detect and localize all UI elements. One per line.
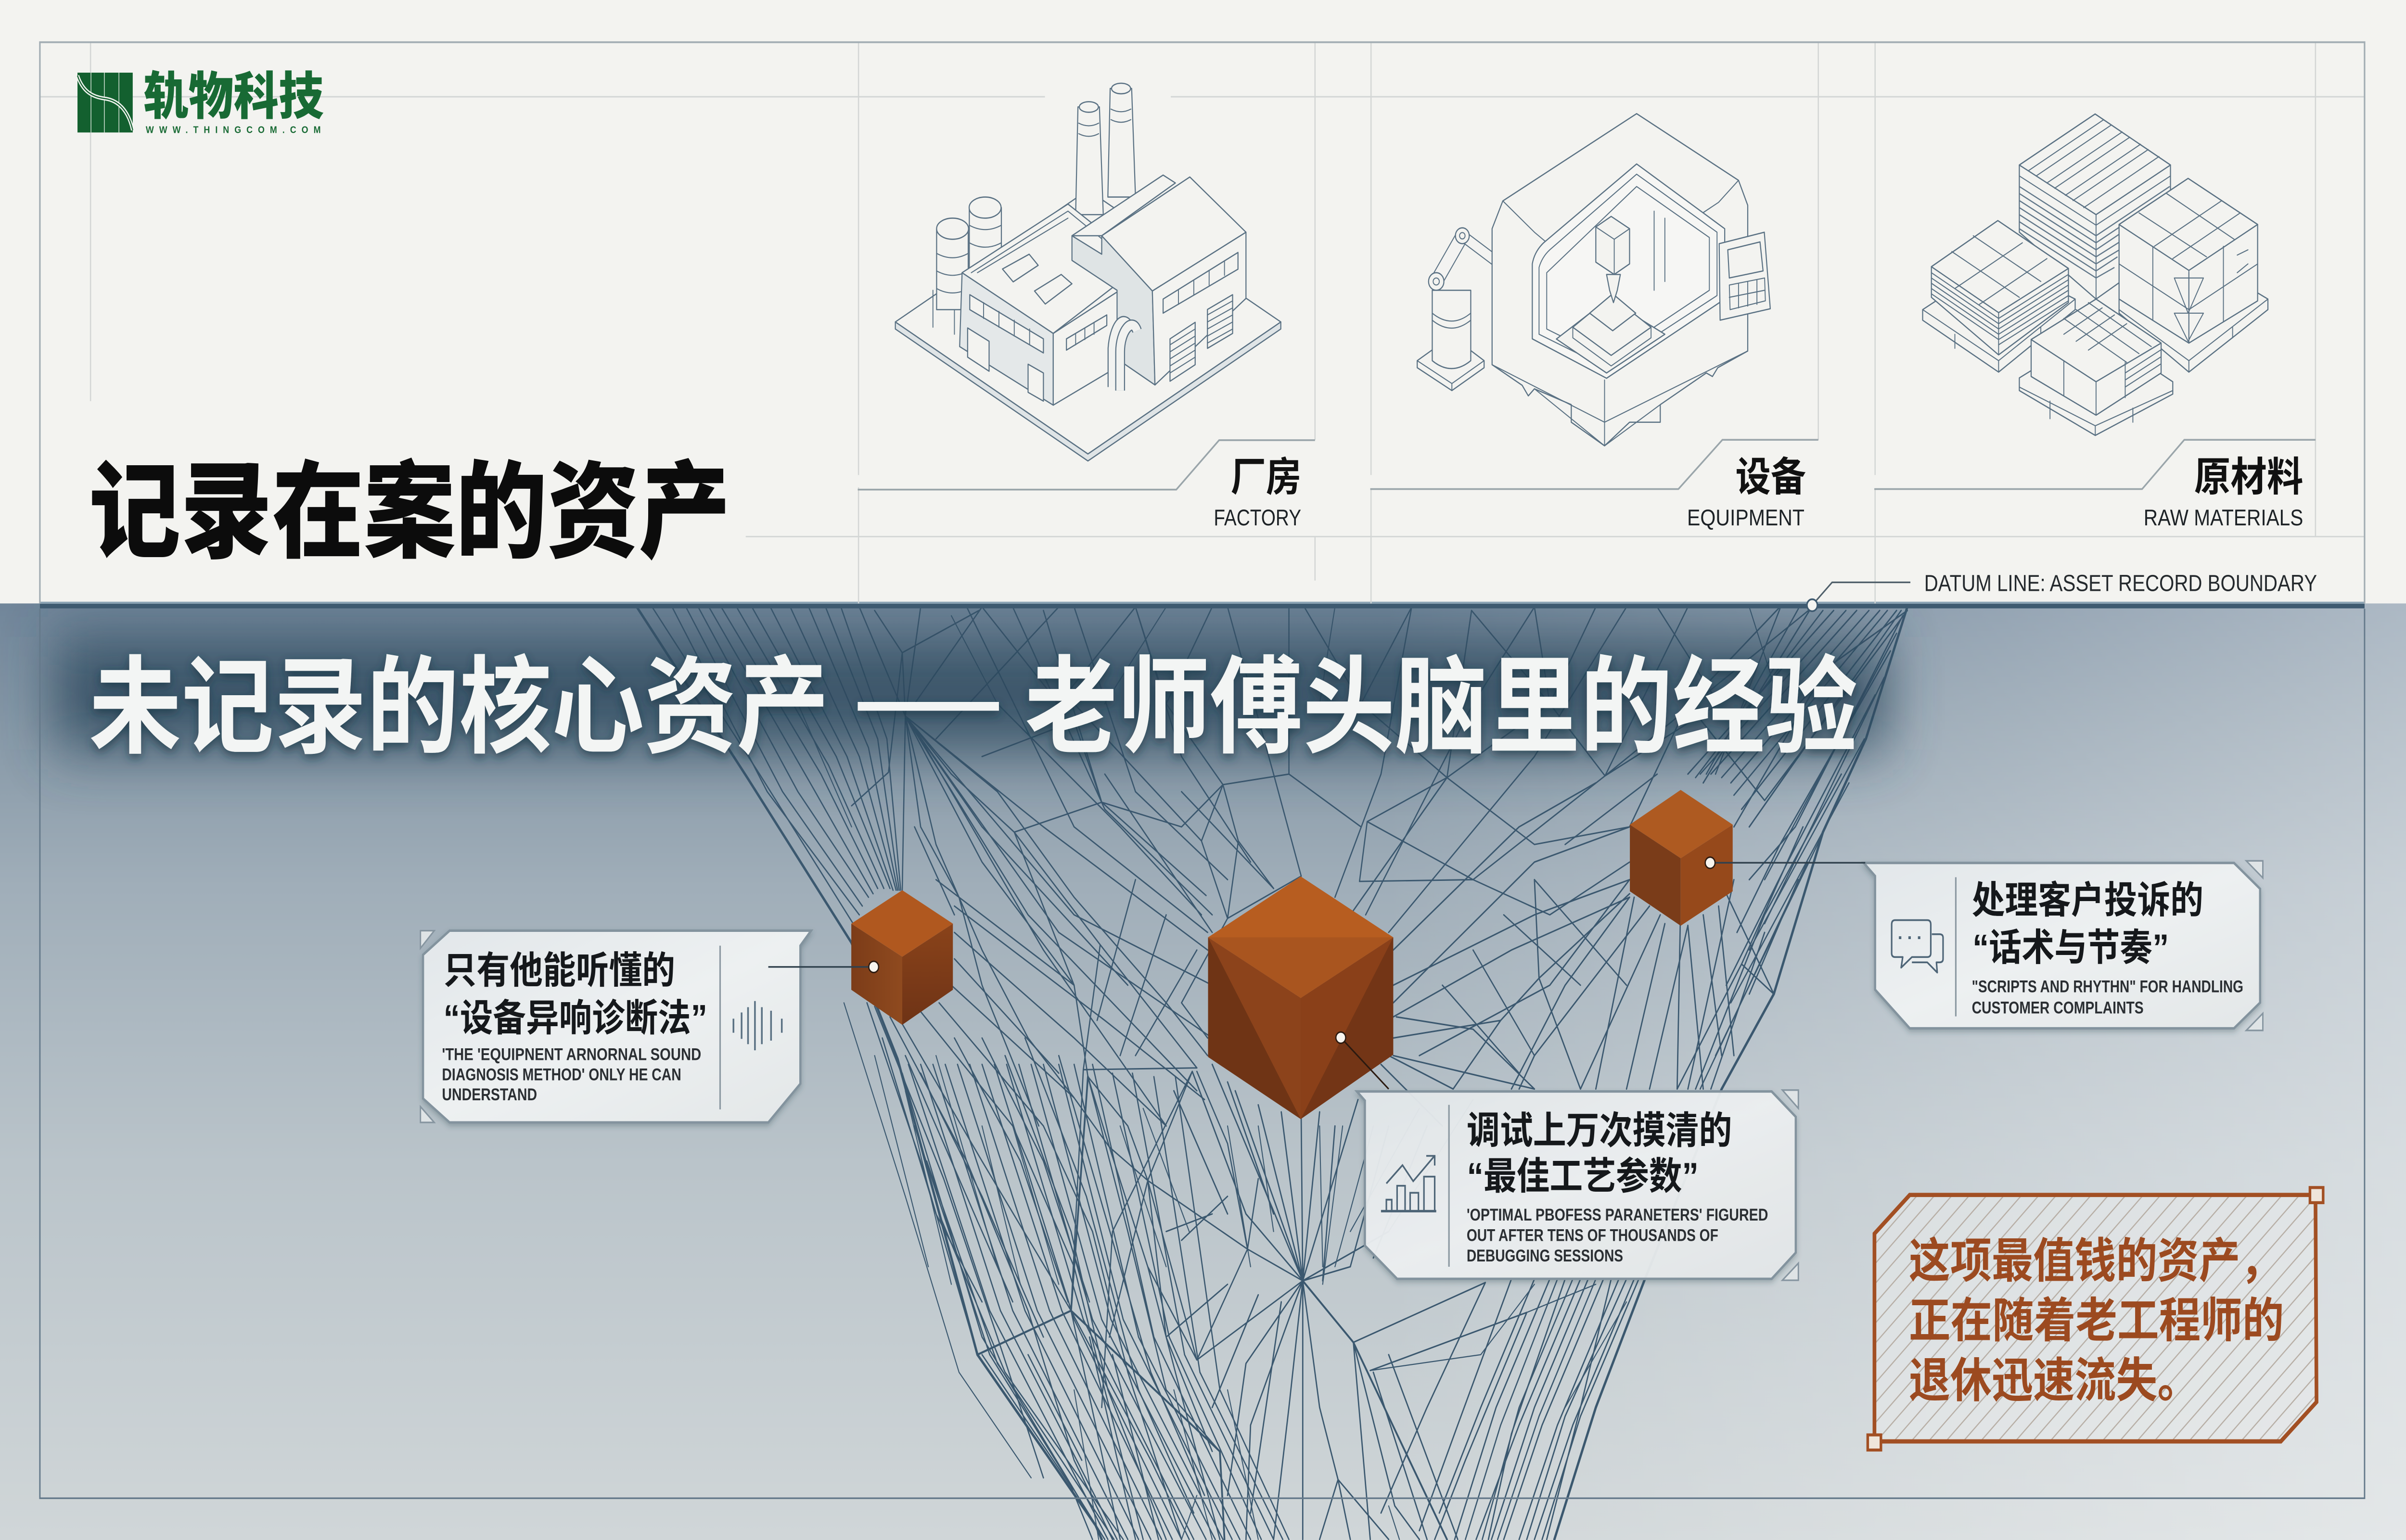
english description: DEBUGGING SESSIONS [1467, 1246, 1623, 1265]
label text: FACTORY: FACTORY [1214, 505, 1301, 531]
heading: recorded assets: 记录在案的资产 [89, 427, 730, 580]
connector: left callout to cube [768, 961, 879, 973]
icon: chart with trend [1381, 1156, 1436, 1211]
icon: chat bubbles [1892, 920, 1943, 973]
right boxes [2119, 178, 2268, 372]
logo [77, 55, 324, 136]
warning text [1909, 1234, 2284, 1407]
cube: right [1630, 790, 1733, 926]
heading text: 调试上万次摸清的 [1467, 1100, 1732, 1155]
datum text: DATUM LINE: ASSET RECORD BOUNDARY [1924, 570, 2317, 596]
connector: right callout to cube [1705, 857, 1865, 868]
logo name: 轨物科技 [143, 55, 324, 129]
english description: OUT AFTER TENS OF THOUSANDS OF [1467, 1226, 1718, 1245]
callout: scripts and rhythm: “话术与节奏” [1972, 927, 2169, 969]
label text: 原材料: 原材料 [2194, 444, 2303, 503]
heading: unrecorded core assets: — [845, 558, 1011, 833]
heading: unrecorded core assets: 未记录的核心资产 [89, 621, 829, 775]
annotation: datum line label [1807, 570, 2317, 611]
datum line [40, 602, 2365, 609]
heading text: 只有他能听懂的 [444, 941, 675, 995]
callout: optimal process parameters [1357, 1090, 1798, 1280]
english description: UNDERSTAND [442, 1085, 537, 1104]
warning text: 退休迅速流失。 [1909, 1354, 2199, 1407]
label text: RAW MATERIALS: RAW MATERIALS [2144, 505, 2303, 531]
icon: equipment [1417, 114, 1770, 446]
card body [1864, 863, 2260, 1028]
front stack [2019, 299, 2173, 435]
logo url: WWW.THINGCOM.COM [146, 125, 320, 136]
panel: recorded assets background [0, 0, 2406, 603]
connector: center callout to cube [1336, 1032, 1389, 1089]
english description [1972, 977, 2243, 1017]
icon: factory [896, 83, 1281, 461]
label: raw materials [1874, 440, 2316, 531]
card body [423, 930, 811, 1122]
english description: CUSTOMER COMPLAINTS [1972, 998, 2144, 1017]
label: equipment [1370, 440, 1818, 531]
corner handle: top right [2310, 1187, 2323, 1203]
left stack [1923, 221, 2075, 372]
heading text: 处理客户投诉的 [1972, 870, 2203, 924]
english description [1467, 1205, 1768, 1265]
heading: unrecorded core assets: 老师傅头脑里的经验 [1025, 621, 1857, 775]
callout: warning conclusion [1868, 1187, 2323, 1450]
cube: left [851, 890, 953, 1025]
card body [1357, 1092, 1796, 1279]
label: factory [858, 440, 1315, 531]
icon: raw materials [1923, 114, 2268, 435]
corner handle: bottom left [1868, 1435, 1881, 1450]
background: lower section gradient [0, 598, 2406, 1540]
label text: EQUIPMENT: EQUIPMENT [1687, 505, 1804, 531]
english description [442, 1045, 701, 1104]
callout: scripts and rhythm [1864, 861, 2263, 1031]
cube: center large [1208, 877, 1393, 1119]
english description: 'OPTIMAL PBOFESS PARANETERS' FIGURED [1467, 1205, 1768, 1224]
title backdrop glow [54, 637, 1887, 750]
chart: funnel-shaped mesh of hidden knowledge [637, 607, 1907, 1540]
label text: 厂房: 厂房 [1230, 444, 1301, 503]
callout: equipment sound diagnosis: “设备异响诊断法” [444, 997, 707, 1039]
english description: 'THE 'EQUIPNENT ARNORNAL SOUND [442, 1045, 701, 1064]
tall stack [2019, 114, 2171, 299]
icon: sound wave [733, 1001, 782, 1050]
english description: "SCRIPTS AND RHYTHN" FOR HANDLING [1972, 977, 2243, 996]
english description: DIAGNOSIS METHOD' ONLY HE CAN [442, 1065, 681, 1084]
label text: 设备: 设备 [1736, 444, 1806, 503]
warning text: 这项最值钱的资产， [1909, 1234, 2282, 1287]
callout: equipment sound diagnosis [421, 930, 811, 1122]
warning text: 正在随着老工程师的 [1909, 1294, 2284, 1348]
callout: optimal process parameters: “最佳工艺参数” [1467, 1155, 1699, 1197]
icon: logo mark [77, 73, 133, 132]
